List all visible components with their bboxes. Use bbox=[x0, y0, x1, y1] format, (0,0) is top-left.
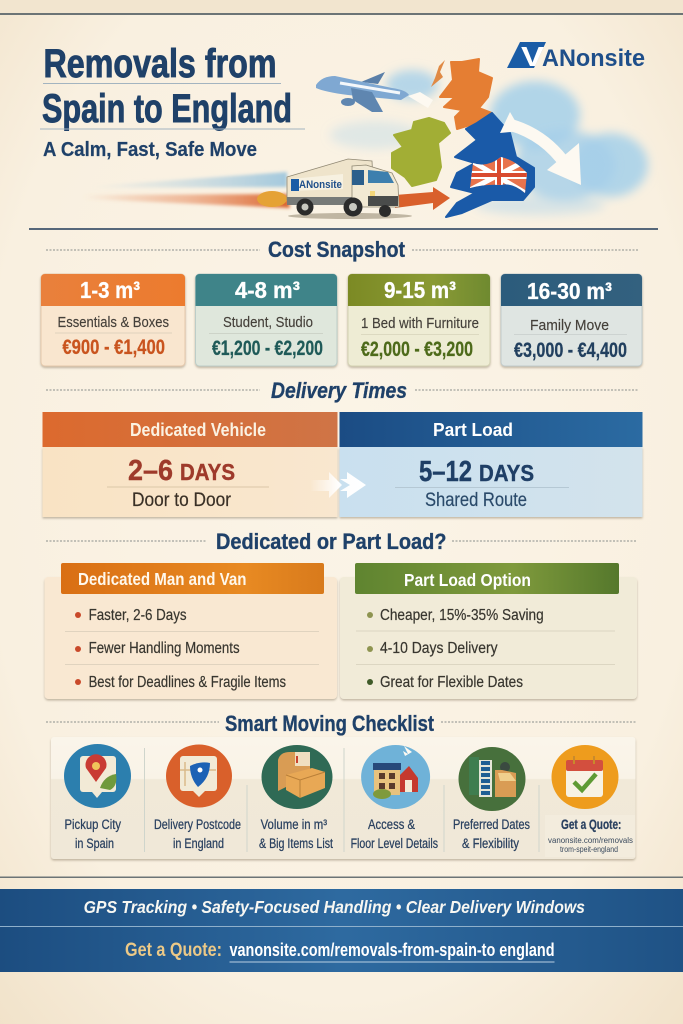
panel: part load: 5–12 bbox=[419, 456, 472, 488]
item: access and floor level bbox=[351, 745, 438, 851]
card: 16-30 m3: 16-30 m³ bbox=[527, 278, 612, 304]
panel: part load bbox=[340, 412, 642, 517]
section: delivery times bbox=[42, 378, 642, 517]
panel: dedicated vehicle: 2–6 bbox=[128, 455, 173, 487]
map: Ireland bbox=[392, 118, 450, 186]
footer quote label: Get a Quote: bbox=[125, 940, 222, 961]
logo: V bbox=[521, 41, 544, 72]
title bbox=[42, 42, 292, 131]
item: delivery postcode: Delivery Postcode bbox=[154, 817, 241, 832]
footer band bbox=[0, 889, 683, 972]
clouds bbox=[330, 70, 648, 215]
arrow: road arrow bbox=[395, 187, 450, 210]
item: pickup city: in Spain bbox=[75, 836, 114, 851]
panel: part load: Part Load bbox=[433, 419, 513, 440]
panel: dedicated vehicle: Door to Door bbox=[132, 489, 231, 511]
panel: dedicated vehicle: Dedicated Vehicle bbox=[130, 419, 266, 440]
heading: Cost Snapshot: Cost Snapshot bbox=[268, 237, 406, 262]
card: 1-3 m3: Essentials & Boxes bbox=[58, 314, 169, 331]
item: pickup city bbox=[64, 744, 131, 851]
panel: part load: DAYS bbox=[479, 460, 534, 486]
panel: part load option bbox=[340, 563, 637, 699]
item: preferred dates: & Flexibility bbox=[462, 836, 519, 851]
header section bbox=[40, 41, 648, 219]
logo: ANonsite bbox=[542, 45, 645, 72]
item: volume bbox=[259, 745, 333, 851]
icon: delivery truck: ANonsite bbox=[299, 179, 342, 191]
footer link: vanonsite.com/removals-from-spain-to england bbox=[230, 940, 554, 960]
map: England and Wales bbox=[446, 113, 534, 217]
card: 16-30 m3: Family Move bbox=[530, 317, 609, 334]
section: dedicated or part load bbox=[44, 529, 637, 699]
card: 9-15 m3 bbox=[348, 274, 490, 366]
item: get a quote: vanonsite.com/removals bbox=[548, 836, 633, 845]
card: 4-8 m3: 4-8 m³ bbox=[235, 277, 300, 303]
section: cost snapshot bbox=[41, 237, 642, 366]
trails bbox=[83, 172, 290, 208]
title: Spain to England bbox=[42, 87, 292, 131]
title: Removals from bbox=[44, 42, 276, 86]
item: volume: Volume in m³ bbox=[261, 817, 327, 832]
subtitle: A Calm, Fast, Safe Move bbox=[43, 139, 257, 161]
panel: dedicated vehicle: DAYS bbox=[180, 459, 235, 485]
item: volume: & Big Items List bbox=[259, 836, 333, 851]
item: delivery postcode: in England bbox=[173, 836, 224, 851]
panel: part load: Shared Route bbox=[425, 489, 527, 511]
section: smart moving checklist bbox=[46, 711, 637, 859]
panel: checklist bbox=[51, 737, 636, 859]
card: 1-3 m3: 1-3 m³ bbox=[80, 277, 140, 303]
panel: part load option: 4-10 Days Delivery bbox=[380, 640, 498, 657]
panel: dedicated man and van bbox=[44, 563, 337, 699]
panel: dedicated man and van: Dedicated Man and Van bbox=[78, 569, 246, 589]
item: pickup city: Pickup City bbox=[64, 817, 121, 832]
icon: dust cloud bbox=[257, 191, 287, 207]
panel: dedicated vehicle bbox=[42, 412, 338, 517]
icon: plane bbox=[316, 72, 433, 112]
panel: dedicated man and van: Fewer Handling Moments bbox=[89, 640, 240, 657]
panel: dedicated man and van: Faster, 2-6 Days bbox=[89, 607, 187, 624]
item: preferred dates bbox=[453, 747, 530, 851]
heading: Smart Moving Checklist: Smart Moving Checklist bbox=[225, 711, 435, 736]
card: 9-15 m3: 9-15 m³ bbox=[384, 277, 456, 303]
item: preferred dates: Preferred Dates bbox=[453, 817, 530, 832]
card: 1-3 m3: €900 - €1,400 bbox=[62, 335, 165, 359]
card: 1-3 m3 bbox=[41, 274, 185, 366]
item: delivery postcode bbox=[154, 744, 241, 851]
arrow: curved white arrow bbox=[500, 112, 581, 185]
item: access and floor level: Floor Level Details bbox=[351, 836, 438, 851]
card: 4-8 m3: €1,200 - €2,200 bbox=[212, 336, 323, 360]
card: 4-8 m3: Student, Studio bbox=[223, 314, 313, 331]
panel: part load option: Great for Flexible Dates bbox=[380, 674, 523, 691]
footer features: GPS Tracking • Safety-Focused Handling • Clear Delivery Windows bbox=[84, 897, 585, 917]
icon: delivery truck bbox=[287, 159, 412, 219]
illustration: map, plane, truck bbox=[83, 59, 648, 219]
card: 4-8 m3 bbox=[196, 274, 337, 366]
map: Scotland and North England bbox=[440, 59, 492, 129]
panel: dedicated man and van: Best for Deadlines & Fragile Items bbox=[89, 674, 286, 691]
item: access and floor level: Access & bbox=[368, 817, 415, 832]
heading: Delivery Times: Delivery Times bbox=[271, 378, 407, 403]
map: Scottish isles bbox=[431, 60, 445, 87]
panel: part load option: Part Load Option bbox=[404, 570, 531, 590]
arrow: transition arrow bbox=[310, 472, 366, 498]
card: 9-15 m3: €2,000 - €3,200 bbox=[361, 337, 473, 361]
top band bbox=[0, 0, 683, 14]
card: 16-30 m3 bbox=[501, 274, 642, 366]
icon: UK flag bbox=[470, 157, 527, 193]
item: get a quote bbox=[545, 745, 635, 857]
panel: part load option: Cheaper, 15%-35% Saving bbox=[380, 607, 544, 624]
item: get a quote: trom-speit-england bbox=[560, 845, 618, 854]
logo bbox=[507, 41, 645, 72]
heading: Dedicated or Part Load?: Dedicated or Part Load? bbox=[216, 529, 446, 554]
item: get a quote: Get a Quote: bbox=[561, 817, 621, 832]
card: 16-30 m3: €3,000 - €4,400 bbox=[514, 338, 627, 362]
card: 9-15 m3: 1 Bed with Furniture bbox=[361, 315, 479, 332]
